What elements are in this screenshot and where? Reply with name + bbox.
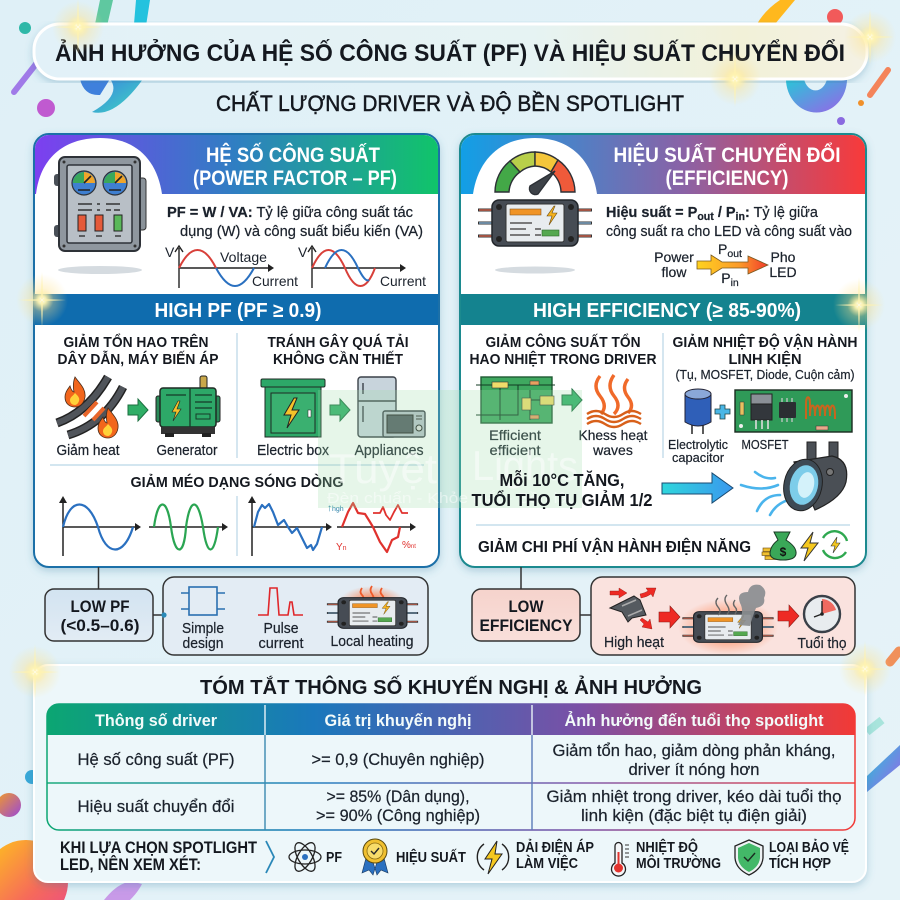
table row: efficiency: [78, 787, 842, 825]
power flow diagram: out: [727, 248, 742, 260]
power flow diagram: in: [731, 277, 739, 289]
labels: capacitor: [672, 450, 725, 465]
footer: selection criteria: KHI LỰA CHỌN SPOTLIGHT: [60, 839, 257, 857]
arrow: [562, 389, 582, 411]
callout: low efficiency: LOW: [508, 597, 544, 616]
callout: capacitor lifetime: TUỔI THỌ TỤ GIẢM 1/2: [472, 489, 653, 510]
power flow diagram: flow: [662, 264, 687, 280]
table row: efficiency: linh kiện (đặc biệt tụ điện giải): [581, 806, 807, 825]
item: protection: [735, 838, 849, 875]
icon: driver: [478, 200, 592, 274]
icon: high heat loss: High heạt: [604, 635, 664, 651]
icon: overheating driver with smoke: [678, 585, 778, 655]
item: temperature: NHIỆT ĐỘ: [636, 838, 698, 856]
icon: circuit board: [476, 377, 555, 423]
callout: capacitor lifetime: Mỗi 10°C TĂNG,: [500, 469, 624, 490]
column: avoid overload: KHÔNG CẦN THIẾT: [273, 350, 403, 368]
icon: high heat loss: [604, 588, 664, 651]
heading: reduced operating cost: GIẢM CHI PHÍ VẬN HÀNH ĐIỆN NĂNG: [478, 537, 751, 556]
panel: summary: [34, 665, 866, 882]
icon: component board: [735, 390, 852, 432]
table row: PF: driver ít nóng hơn: [628, 760, 760, 779]
column: avoid overload: [257, 333, 425, 459]
labels: Giảm heat: [56, 443, 120, 459]
chart: clean blue sine: [59, 496, 141, 556]
band: high efficiency: [461, 294, 865, 325]
PF definition text: dụng (W) và công suất biểu kiến (VA): [180, 223, 423, 240]
item: voltage range: [477, 838, 594, 874]
icon: simple design: Simple: [182, 621, 224, 637]
efficiency definition text: :: [745, 204, 750, 221]
band: high efficiency: HIGH EFFICIENCY (≥ 85-90%): [533, 300, 801, 322]
chart: distorted red wave: Yn: [336, 542, 347, 553]
chart: in-phase waves: Current: [252, 273, 298, 289]
arrow: [128, 399, 148, 421]
PF definition text: PF = W / VA: Tỷ lệ giữa công suất tác: [167, 204, 413, 221]
arrow: [330, 399, 350, 421]
efficiency definition text: [606, 204, 852, 240]
watermark: [318, 390, 582, 508]
power flow diagram: Power: [654, 249, 694, 265]
table row: PF: >= 0,9 (Chuyên nghiệp): [312, 750, 484, 769]
labels: Electric box: [257, 443, 330, 459]
title banner: [34, 24, 867, 79]
subtitle: CHẤT LƯỢNG DRIVER VÀ ĐỘ BỀN SPOTLIGHT: [216, 91, 684, 116]
icon: appliances: [358, 377, 425, 437]
icon: electric box: [261, 379, 325, 437]
callout: low PF: [45, 589, 153, 641]
efficiency definition text: Tỷ lệ giữa: [754, 204, 820, 221]
labels: [489, 427, 648, 458]
panel: power factor: [34, 134, 439, 567]
item: voltage range: LÀM VIỆC: [516, 854, 578, 872]
icon: spotlight: [741, 442, 847, 515]
table row: PF: Hệ số công suất (PF): [78, 750, 234, 769]
table row: efficiency: Hiệu suất chuyển đổi: [78, 797, 234, 816]
power flow diagram: P: [718, 241, 727, 257]
icon: pulse current: current: [258, 636, 304, 652]
panel header: efficiency: (EFFICIENCY): [666, 167, 788, 190]
icon: plus: [715, 405, 730, 419]
chart: out-of-phase waves: V: [298, 244, 308, 260]
labels: Khess heạt: [578, 427, 648, 443]
labels: Electrolytic: [668, 437, 728, 452]
power flow diagram: LED: [769, 264, 797, 280]
item: PF: PF: [326, 850, 342, 866]
column: reduce driver heat loss: GIẢM CÔNG SUẤT TỔN: [486, 333, 640, 351]
item: protection: TÍCH HỢP: [769, 855, 831, 872]
icon: money, bolt, energy: $: [780, 545, 787, 559]
chart: out-of-phase waves: Current: [380, 273, 426, 289]
watermark: Tuyệt: [329, 445, 437, 492]
watermark: Lights: [472, 442, 578, 489]
icon: lifetime clock: Tuổi thọ: [798, 636, 846, 652]
table row: efficiency: Giảm nhiệt trong driver, kéo dài tuổi thọ: [546, 787, 842, 806]
labels: [668, 437, 789, 465]
labels: Generator: [156, 443, 218, 459]
heading: waveform: GIẢM MÉO DẠNG SÓNG DÒNG: [130, 473, 344, 491]
panel: efficiency: [460, 134, 866, 567]
table row: efficiency: >= 85% (Dân dụng),: [326, 787, 470, 806]
arrow: [778, 605, 799, 627]
chart: distorted red wave: ↑hgh: [327, 503, 344, 514]
item: temperature: MÔI TRƯỜNG: [636, 854, 721, 872]
column: reduce component temperature: (Tụ, MOSFET, Diode, Cuộn cảm): [676, 367, 854, 382]
chart: in-phase waves: [165, 244, 298, 289]
footer: selection criteria: LED, NÊN XEM XÉT:: [60, 855, 201, 874]
heading: summary: TÓM TẮT THÔNG SỐ KHUYẾN NGHỊ & ẢNH HƯỞNG: [200, 675, 702, 699]
icon: simple design: design: [182, 636, 224, 652]
labels: waves: [592, 442, 633, 458]
sparkles: [9, 0, 896, 700]
item: protection: LOẠI BẢO VỆ: [769, 838, 849, 856]
table row: efficiency: >= 90% (Công nghiệp): [316, 806, 480, 825]
efficiency definition text: Hiệu suất = P: [606, 204, 697, 221]
icon: capacitor: [685, 389, 711, 434]
icon: overheated wires: [57, 377, 123, 438]
item: voltage range: DẢI ĐIỆN ÁP: [516, 838, 594, 856]
panel: low PF effects: [161, 577, 428, 655]
chart: in-phase waves: V: [165, 244, 175, 260]
column: reduce component temperature: [668, 333, 858, 465]
item: PF: [289, 840, 342, 874]
icon: local heating driver: [327, 586, 418, 650]
icon: money, bolt, energy: [762, 531, 847, 561]
icon: generator: [156, 376, 220, 437]
callout: capacitor lifetime: [472, 469, 653, 510]
icon: local heating driver: Local heating: [330, 634, 414, 650]
panel header: power factor: [35, 135, 438, 194]
panel header: efficiency: [461, 135, 865, 194]
table: [47, 704, 855, 830]
icon: pulse current: Pulse: [264, 621, 298, 637]
watermark: Đèn chuẩn - Khỏe mắt - Bền lâu: [327, 490, 577, 507]
labels: Appliances: [354, 443, 424, 459]
table header: Ảnh hưởng đến tuổi thọ spotlight: [564, 711, 824, 730]
column: avoid overload: TRÁNH GÂY QUÁ TẢI: [268, 333, 408, 351]
efficiency definition text: / P: [714, 204, 736, 221]
panel: low efficiency effects: [591, 577, 855, 655]
labels: MOSFET: [742, 437, 789, 452]
item: efficiency: HIỆU SUẤT: [396, 848, 466, 866]
chart: distorted blue wave: [248, 496, 332, 556]
chart: out-of-phase waves: [298, 244, 426, 289]
efficiency definition text: out: [697, 211, 714, 223]
band: high PF: [35, 294, 438, 325]
table header: [95, 711, 824, 730]
icon: efficiency gauge: [495, 152, 575, 195]
connector: low PF: [98, 567, 164, 615]
column: reduce driver heat loss: [470, 333, 657, 458]
item: temperature: [612, 838, 721, 876]
chart: distorted red wave: %nt: [402, 540, 416, 551]
column: reduce losses: [56, 333, 220, 459]
icon: control box with gauges: [54, 157, 146, 274]
table row: PF: Giảm tổn hao, giảm dòng phản kháng,: [552, 741, 836, 760]
arrow: cooling: [662, 473, 733, 503]
item: efficiency: [362, 839, 466, 875]
chart: clean green sine: [149, 504, 228, 550]
column: reduce losses: DÂY DẪN, MÁY BIẾN ÁP: [58, 350, 218, 368]
column: reduce component temperature: GIẢM NHIỆT ĐỘ VẬN HÀNH: [672, 333, 858, 351]
icon: pulse current: [258, 588, 304, 652]
icon: heat waves: [587, 375, 641, 427]
callout: low PF: LOW PF: [70, 597, 130, 616]
icon: simple design: [181, 587, 225, 652]
callout: low PF: (<0.5–0.6): [60, 616, 140, 635]
panel header: power factor: HỆ SỐ CÔNG SUẤT: [206, 143, 380, 167]
connector: low efficiency: [521, 567, 592, 615]
column: reduce component temperature: LINH KIỆN: [728, 350, 802, 368]
chart: distorted red wave: [327, 503, 416, 553]
callout: low efficiency: EFFICIENCY: [480, 616, 573, 635]
labels: [257, 443, 424, 459]
icon: lifetime clock: [798, 596, 846, 652]
chart: in-phase waves: Voltage: [220, 249, 267, 265]
footer: selection criteria: [60, 838, 849, 876]
panel header: efficiency: HIỆU SUẤT CHUYỂN ĐỔI: [614, 143, 840, 167]
power flow diagram: Pho: [771, 249, 796, 265]
table header: Giá trị khuyến nghị: [324, 711, 472, 730]
PF definition text: [167, 204, 423, 240]
labels: efficient: [490, 442, 541, 458]
efficiency definition text: in: [736, 211, 745, 223]
column: reduce losses: GIẢM TỔN HAO TRÊN: [64, 333, 208, 351]
panel header: power factor: (POWER FACTOR – PF): [193, 167, 397, 190]
callout: low efficiency: [472, 589, 580, 641]
power flow diagram: P: [721, 270, 731, 286]
table row: PF: [78, 741, 836, 779]
power flow diagram: [654, 241, 797, 289]
efficiency definition text: công suất ra cho LED và công suất vào: [606, 223, 852, 240]
band: high PF: HIGH PF (PF ≥ 0.9): [154, 300, 322, 322]
labels: Efficient: [489, 427, 541, 443]
column: reduce driver heat loss: HAO NHIỆT TRONG DRIVER: [470, 350, 657, 368]
arrow: [659, 606, 680, 628]
title banner: ẢNH HƯỞNG CỦA HỆ SỐ CÔNG SUẤT (PF) VÀ HIỆU SUẤT CHUYỂN ĐỔI: [55, 38, 845, 67]
table header: Thông số driver: [95, 711, 217, 730]
labels: [56, 443, 218, 459]
